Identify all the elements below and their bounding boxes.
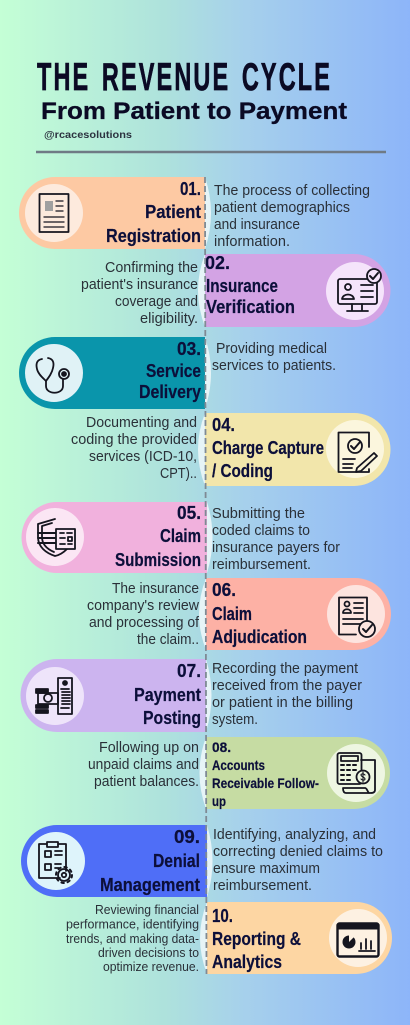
icon: checklist with pen [338, 432, 377, 472]
step 06: claim adjudication [87, 578, 391, 650]
description 02: patient's insurance [81, 277, 198, 293]
heading 06: Claim [212, 603, 252, 624]
step 03: service delivery [19, 337, 336, 409]
pill 04 [205, 413, 390, 486]
description 05: insurance payers for [212, 540, 340, 556]
description 04: Documenting and [86, 415, 197, 431]
description 08: Following up on [99, 740, 199, 756]
description 09: ensure maximum [213, 861, 320, 877]
heading 01: 01. [180, 178, 201, 199]
description 05: reimbursement. [212, 557, 311, 573]
heading 03: Delivery [139, 381, 202, 402]
description 03: Providing medical [216, 341, 327, 357]
heading 04: 04. [212, 414, 235, 435]
step 07: payment posting [20, 659, 362, 732]
heading 04 [212, 414, 324, 481]
pill 02 [205, 254, 390, 327]
description 09: Identifying, analyzing, and [213, 827, 376, 843]
description 08: unpaid claims and [88, 757, 199, 773]
icon: monitor with check [338, 269, 381, 311]
description 02 [81, 260, 198, 327]
description 08: patient balances. [94, 774, 199, 790]
description 10: optimize revenue. [103, 960, 199, 974]
description 01 [214, 183, 370, 250]
description 07: received from the payer [212, 678, 362, 694]
heading 01: Patient [145, 201, 201, 222]
heading 07: 07. [177, 660, 201, 681]
pill 09 [21, 825, 207, 897]
icon: receipt and money [36, 678, 72, 714]
heading 10: Analytics [212, 951, 282, 972]
icon: profile document with check [339, 598, 375, 637]
description 06 [87, 581, 200, 648]
description 04: services (ICD-10, [89, 449, 197, 465]
heading 10 [212, 905, 301, 972]
heading 01 [106, 178, 201, 246]
icon: stethoscope [37, 358, 69, 393]
description 09: correcting denied claims to [213, 844, 383, 860]
subtitle: From Patient to Payment [41, 98, 347, 125]
heading 04: / Coding [212, 460, 273, 481]
heading 10: Reporting & [212, 928, 301, 949]
heading 06: Adjudication [212, 626, 307, 647]
description 02: coverage and [115, 294, 198, 310]
description 02: Confirming the [105, 260, 198, 276]
description 04: CPT).. [160, 466, 197, 482]
description 09 [213, 827, 383, 894]
description 06: and processing of [89, 615, 200, 631]
description 01: The process of collecting [214, 183, 370, 199]
heading 06 [212, 579, 307, 647]
handle: @rcacesolutions [44, 129, 132, 141]
description 01: patient demographics [214, 200, 350, 216]
icon: analytics window [338, 924, 378, 956]
heading 05: 05. [177, 502, 201, 523]
heading 08: up [212, 793, 226, 809]
heading 02 [205, 252, 295, 317]
description 10: performance, identifying [66, 918, 199, 932]
step 05: claim submission [21, 502, 340, 573]
heading 04: Charge Capture [212, 437, 324, 458]
heading 09: Denial [153, 850, 200, 871]
description 10: driven decisions to [98, 946, 199, 960]
description 02: eligibility. [140, 311, 198, 327]
heading 09 [100, 826, 200, 895]
heading 10: 10. [212, 905, 233, 926]
heading 01: Registration [106, 225, 201, 246]
step 02: insurance verification [81, 252, 390, 327]
description 04 [71, 415, 197, 482]
icon: calculator and coins [338, 753, 375, 793]
step 04: charge capture [71, 413, 390, 486]
step 01: patient registration [19, 177, 370, 250]
heading 07: Payment [134, 684, 201, 705]
description 01: information. [214, 234, 290, 250]
step 08: accounts receivable [88, 737, 390, 809]
heading 09: Management [100, 874, 200, 895]
heading 03 [139, 338, 202, 402]
description 10: Reviewing financial [95, 903, 199, 917]
icon: document [40, 194, 68, 232]
heading 08 [212, 739, 319, 809]
pill 01 [19, 177, 205, 249]
description 07: or patient in the billing [212, 695, 353, 711]
heading 02: Verification [206, 296, 295, 317]
step 09: denial management [21, 825, 383, 897]
pill 07 [20, 659, 206, 732]
description 05: Submitting the [212, 506, 305, 522]
heading 08: Receivable Follow- [212, 775, 319, 791]
description 10 [66, 903, 199, 974]
heading 03: Service [146, 360, 201, 381]
heading 07: Posting [143, 707, 201, 728]
description 04: coding the provided [71, 432, 197, 448]
description 03 [212, 341, 336, 374]
heading 05: Submission [115, 549, 201, 570]
description 05 [212, 506, 340, 573]
description 05: coded claims to [212, 523, 310, 539]
heading 08: 08. [212, 739, 231, 755]
pill 08 [206, 737, 390, 809]
icon: clipboard with gear [39, 842, 72, 883]
heading 02: 02. [205, 252, 230, 273]
description 06: the claim.. [137, 632, 199, 648]
pill 06 [206, 578, 391, 650]
description 06: The insurance [112, 581, 199, 597]
description 03: services to patients. [212, 358, 336, 374]
description 01: and insurance [214, 217, 300, 233]
pill 03 [19, 337, 205, 409]
pill 10 [207, 902, 392, 974]
description 07: Recording the payment [212, 661, 358, 677]
heading 08: Accounts [212, 757, 265, 773]
step 10: reporting and analytics [66, 902, 392, 974]
description 07: system. [212, 712, 258, 728]
heading 03: 03. [177, 338, 201, 359]
heading 02: Insurance [206, 275, 278, 296]
description 06: company's review [87, 598, 199, 614]
heading 06: 06. [212, 579, 236, 600]
heading 05 [115, 502, 201, 570]
heading 09: 09. [174, 826, 200, 847]
description 10: trends, and making data- [66, 932, 199, 946]
description 09: reimbursement. [213, 878, 312, 894]
icon: shield with card [38, 519, 75, 556]
description 07 [212, 661, 362, 728]
heading 05: Claim [160, 525, 201, 546]
heading 07 [134, 660, 201, 728]
description 08 [88, 740, 199, 790]
pill 05 [21, 502, 207, 573]
